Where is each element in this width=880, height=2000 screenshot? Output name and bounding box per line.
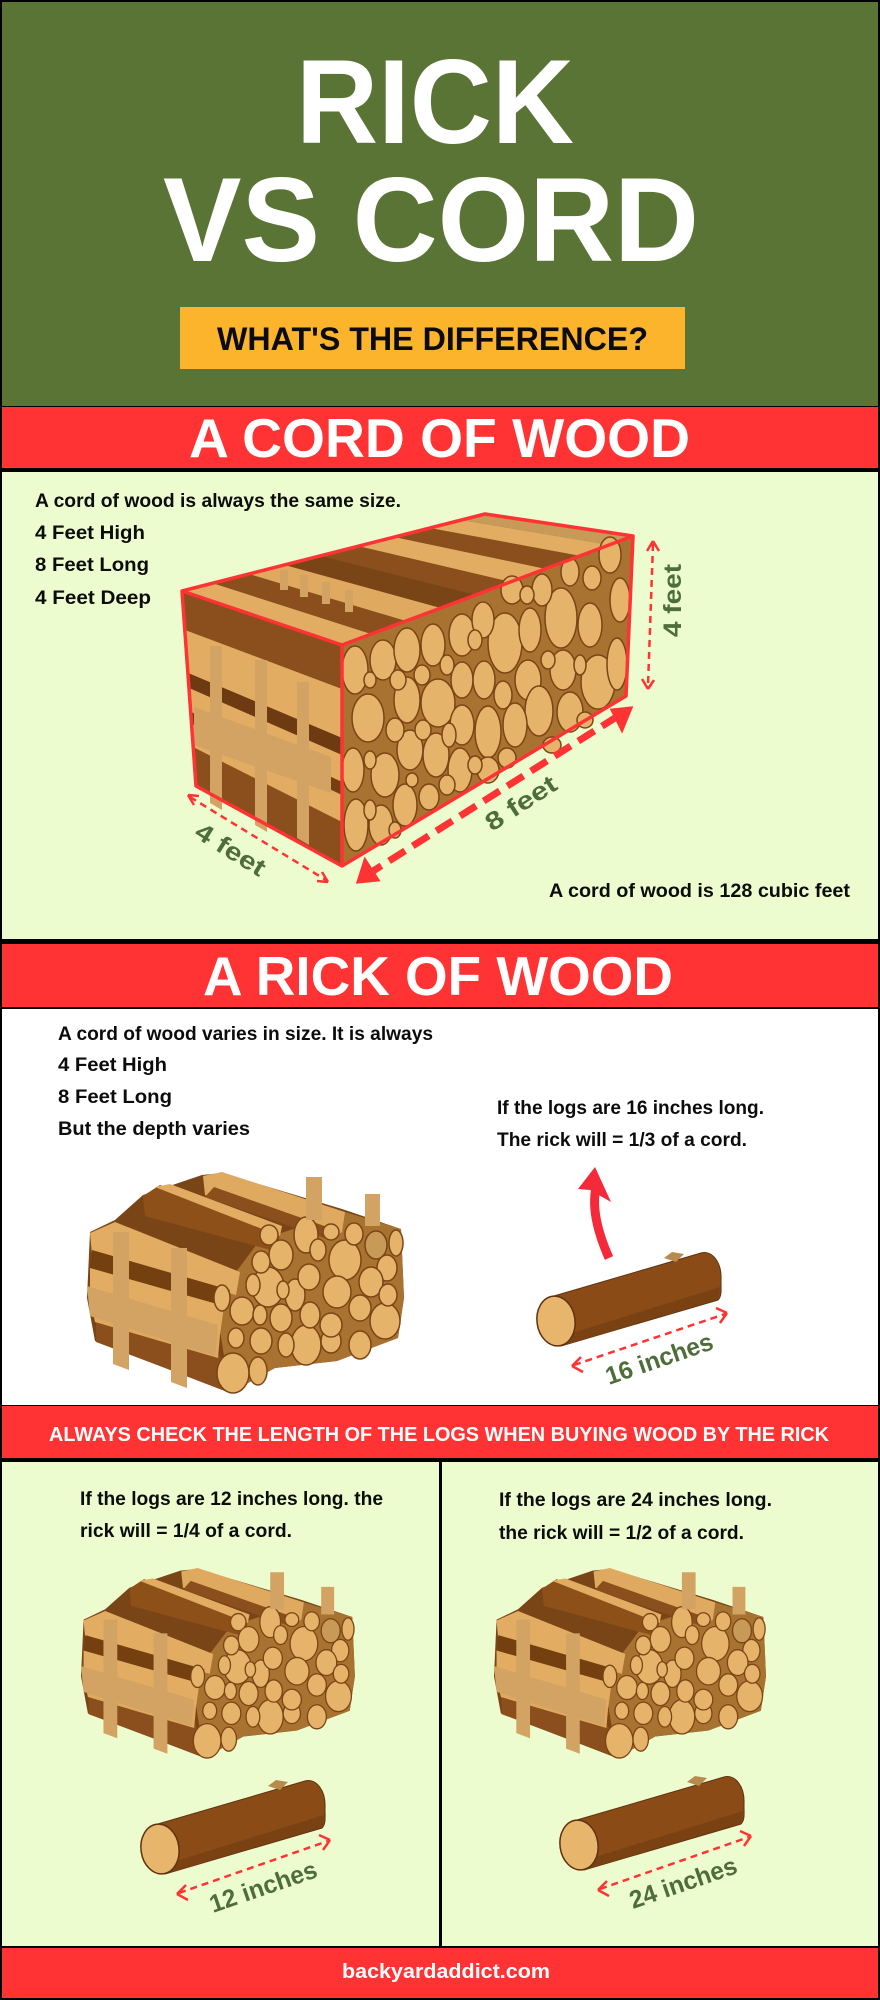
stack end face: log ends (342, 536, 633, 866)
dimension: 4 feet depth arrow (188, 795, 328, 882)
panel: 24 inch logs (442, 1462, 878, 1946)
dimension arrow: 16 inches (572, 1308, 727, 1372)
24 inch note: the rick will = 1/2 of a cord. (499, 1522, 744, 1544)
label: 4 feet vertical: 4 feet (659, 563, 687, 637)
title line: RICK: RICK (296, 35, 574, 169)
red outline of cord volume (182, 514, 633, 866)
header panel (2, 2, 878, 406)
illustration: cord wood stack (182, 514, 633, 866)
warning band: ALWAYS CHECK THE LENGTH OF THE LOGS WHEN BUYING WOOD BY THE RICK (49, 1424, 830, 1446)
illustration: 24 inch log (557, 1776, 744, 1872)
stack side face: long logs (182, 591, 342, 866)
panel: 12 inch logs (2, 1462, 439, 1946)
footer band: backyardaddict.com (342, 1961, 550, 1983)
12 inch note (80, 1488, 383, 1542)
illustration: 16 inch log (534, 1252, 721, 1348)
12 inch note: If the logs are 12 inches long. the (80, 1488, 383, 1510)
rick description text: 4 Feet High (58, 1054, 167, 1076)
label: 8 feet: 8 feet (480, 770, 563, 837)
warning band (2, 1406, 878, 1458)
dimension arrow: 12 inches (177, 1835, 330, 1900)
rick description text: A cord of wood varies in size. It is always (58, 1023, 433, 1045)
illustration: rick wood stack (87, 1172, 404, 1393)
cord description text: 4 Feet Deep (35, 587, 151, 609)
label: 16 inches: 16 inches (602, 1328, 717, 1391)
dimension arrow: 24 inches (598, 1831, 751, 1896)
cord heading band: A CORD OF WOOD (189, 407, 690, 469)
cord description text: 8 Feet Long (35, 554, 149, 576)
illustration: wood stack (81, 1568, 355, 1758)
curved arrow (578, 1167, 611, 1258)
24 inch note: If the logs are 24 inches long. (499, 1489, 772, 1511)
label: 24 inches: 24 inches (626, 1852, 741, 1915)
dimension: 8 feet arrow (358, 708, 631, 882)
panel: rick of wood (2, 1009, 878, 1405)
cord description text: 4 Feet High (35, 522, 145, 544)
rick description text: But the depth varies (58, 1118, 250, 1140)
12 inch note: rick will = 1/4 of a cord. (80, 1520, 292, 1542)
stack top face (182, 514, 633, 645)
footer band (2, 1948, 878, 1998)
cord description text: A cord of wood is always the same size. (35, 490, 401, 512)
label: 4 feet depth: 4 feet (190, 817, 271, 883)
subtitle badge (180, 307, 685, 369)
rick heading band: A RICK OF WOOD (203, 945, 673, 1007)
cord heading band (2, 407, 878, 469)
illustration: wood stack (494, 1568, 766, 1758)
cord volume note: A cord of wood is 128 cubic feet (549, 880, 850, 902)
rick description text: 8 Feet Long (58, 1086, 172, 1108)
label: 12 inches: 12 inches (206, 1856, 321, 1919)
subtitle badge: WHAT'S THE DIFFERENCE? (217, 321, 648, 357)
16 inch note: If the logs are 16 inches long. (497, 1097, 764, 1119)
panel: cord of wood (2, 472, 878, 939)
illustration: 12 inch log (138, 1780, 325, 1876)
16 inch note (497, 1097, 764, 1151)
16 inch note: The rick will = 1/3 of a cord. (497, 1129, 747, 1151)
rick description text (58, 1023, 433, 1140)
24 inch note (499, 1489, 772, 1544)
title line: VS CORD: VS CORD (163, 153, 699, 287)
cord description text (35, 490, 401, 609)
dimension: 4 feet height arrow (642, 541, 659, 689)
rick heading band (2, 944, 878, 1007)
